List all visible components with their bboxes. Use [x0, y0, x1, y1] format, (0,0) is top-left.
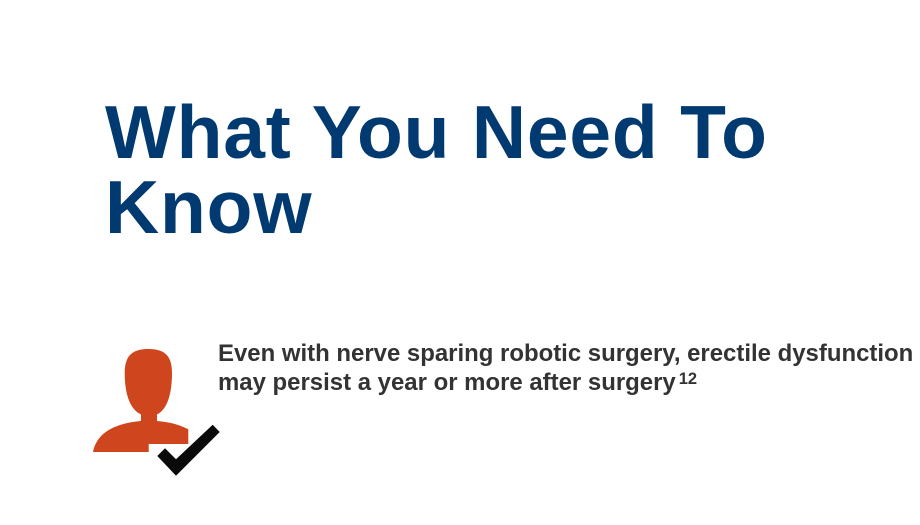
icon: check mark [157, 425, 220, 476]
text block: erectile dysfunction statement: may persist a year or more after surgery12 [218, 369, 697, 396]
title: Know [105, 164, 312, 248]
title [105, 90, 768, 248]
text block: erectile dysfunction statement: Even with nerve sparing robotic surgery, erectile dysfunction [218, 340, 913, 367]
icon: person silhouette [93, 349, 188, 452]
title: What You Need To [105, 90, 768, 174]
text block: erectile dysfunction statement [218, 340, 913, 396]
